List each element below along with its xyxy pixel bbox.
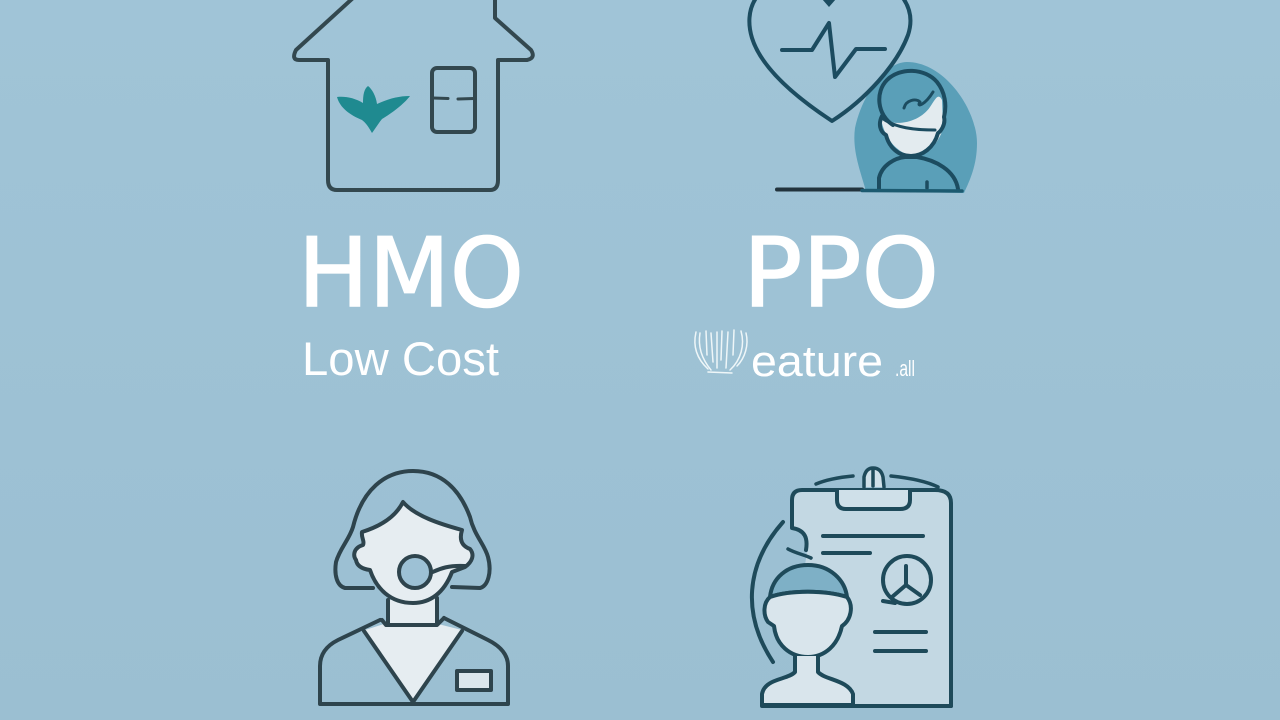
label: garbled feature text (695, 330, 915, 386)
heading: PPO: PPO (743, 219, 939, 329)
clipboard sheet (790, 490, 951, 706)
headset mic (428, 566, 465, 574)
hair curl (882, 92, 935, 130)
heart top notch (822, 0, 836, 7)
glitched glyph (695, 330, 747, 373)
patient head (770, 565, 847, 597)
icon: heart with person (749, 0, 977, 193)
text lines (823, 536, 926, 651)
icon: clipboard with patient (752, 468, 951, 706)
teal leaf (337, 86, 410, 133)
face (354, 502, 472, 603)
house window (432, 68, 475, 132)
heart outline (749, 0, 910, 121)
collar v-neck (365, 624, 462, 701)
shoulders (879, 157, 958, 189)
icon: support agent with headset (320, 471, 508, 704)
clip arcs (816, 476, 938, 487)
name badge (457, 671, 491, 690)
heading: HMO: HMO (298, 219, 524, 329)
eature: eature (751, 337, 883, 386)
icon: house with leaf (294, 0, 533, 190)
head and hair (879, 71, 945, 156)
person (879, 71, 958, 189)
person backdrop blob (854, 62, 977, 193)
neck (388, 598, 437, 625)
patient shoulders (762, 656, 853, 705)
top clip (837, 490, 910, 509)
small suffix: .all (895, 356, 915, 381)
side arc (752, 522, 783, 662)
face (881, 97, 943, 155)
base line (777, 188, 862, 192)
uniform (320, 618, 508, 704)
house outline (294, 0, 533, 190)
heartbeat line (782, 23, 885, 77)
hair (335, 471, 490, 588)
gauge circle (883, 556, 931, 604)
clipboard outline (792, 490, 951, 706)
label: Low Cost: Low Cost (302, 332, 499, 385)
